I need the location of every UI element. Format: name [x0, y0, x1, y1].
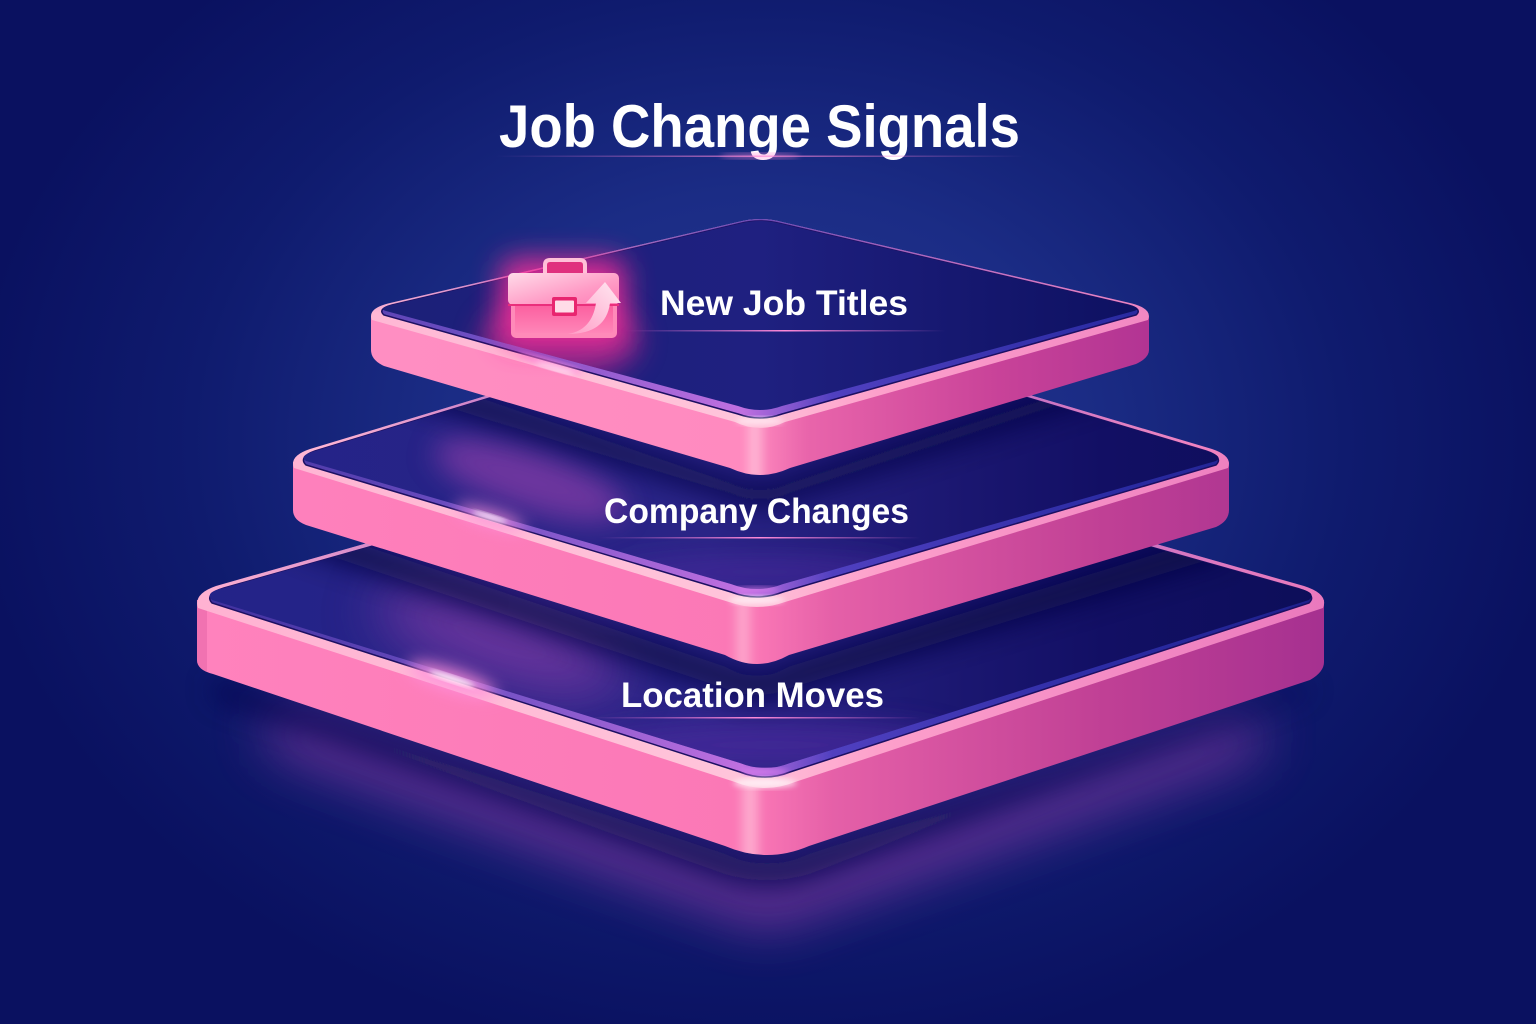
tier 3 side wall [197, 590, 1324, 870]
tier 3 inner lip [210, 441, 1312, 777]
tier 2: Company Changes [293, 396, 1229, 664]
tier 2 top surface [303, 398, 1218, 589]
tier 2 side wall [293, 462, 1229, 675]
tier 2 specular highlight [453, 500, 785, 604]
tier 2 rim [293, 318, 1229, 607]
tier 3: Location Moves [197, 544, 1324, 855]
icon: briefcase with up arrow [500, 258, 626, 346]
tier 3 top surface [210, 546, 1312, 768]
title: Job Change Signals [499, 93, 1020, 160]
tier 3 rim [197, 436, 1324, 788]
tier 2 inner lip [303, 321, 1218, 597]
tier 1 rim [371, 219, 1149, 428]
tier 1 specular highlight [516, 351, 784, 424]
label: Location Moves: Location Moves [621, 676, 884, 715]
tier 1 top surface [383, 221, 1137, 410]
tier 3 specular highlight [405, 655, 797, 788]
label: New Job Titles: New Job Titles [660, 284, 908, 323]
tier 1 inner lip [382, 221, 1138, 418]
floor glow beneath the stack [213, 680, 1310, 925]
tier 1: New Job Titles [371, 219, 1149, 485]
label: Company Changes: Company Changes [604, 492, 909, 531]
tier 1 side wall [371, 316, 1149, 485]
